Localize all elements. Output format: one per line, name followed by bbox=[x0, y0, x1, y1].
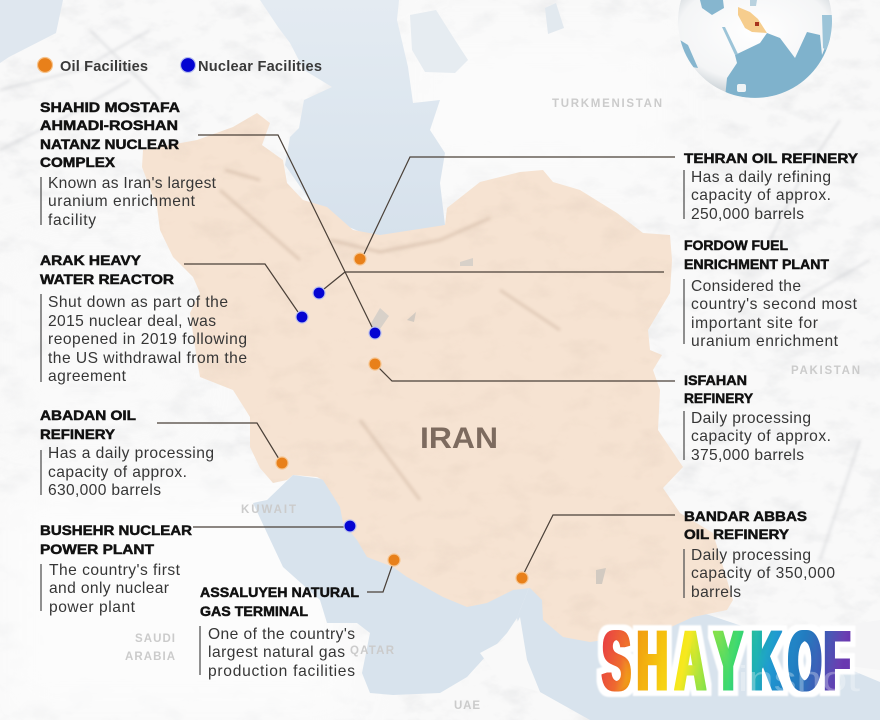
heading: Abadan: ABADAN OIL bbox=[40, 408, 136, 424]
heading: Isfahan bbox=[684, 373, 754, 407]
description: Tehran: Has a daily refining bbox=[691, 169, 831, 186]
description: Natanz: Known as Iran's largest bbox=[48, 175, 217, 192]
heading: Isfahan: REFINERY bbox=[684, 391, 754, 407]
marker: Bushehr bbox=[344, 520, 356, 532]
neighbouring country labels: QATAR bbox=[350, 645, 395, 657]
heading: Assaluyeh: ASSALUYEH NATURAL bbox=[200, 585, 359, 601]
description: Natanz: uranium enrichment bbox=[48, 193, 196, 210]
description: Fordow: country's second most bbox=[691, 296, 858, 313]
logo: SHAYKOF: SHAYKOF bbox=[602, 614, 850, 709]
neighbouring country labels: SAUDI bbox=[135, 633, 175, 645]
leader line: Natanz bbox=[198, 135, 373, 329]
leader line: Isfahan bbox=[379, 368, 675, 381]
leader line: Bushehr bbox=[193, 526, 346, 528]
description: Isfahan: capacity of approx. bbox=[691, 428, 831, 445]
heading: Natanz: NATANZ NUCLEAR bbox=[40, 137, 179, 153]
description: Bandar Abbas bbox=[684, 547, 835, 601]
marker: Tehran oil refinery bbox=[354, 253, 366, 265]
watermark: inshot bbox=[738, 658, 860, 699]
description: Bushehr: The country's first bbox=[49, 562, 181, 579]
heading: Abadan bbox=[40, 408, 136, 443]
heading: Bandar Abbas: OIL REFINERY bbox=[684, 527, 790, 543]
marker: Bandar Abbas bbox=[516, 572, 528, 584]
heading: Assaluyeh: GAS TERMINAL bbox=[200, 604, 308, 620]
marker: Isfahan refinery bbox=[369, 358, 381, 370]
description: Abadan: capacity of approx. bbox=[48, 464, 187, 481]
description: Tehran bbox=[684, 169, 831, 223]
description: Fordow: uranium enrichment bbox=[691, 333, 839, 350]
description: Arak bbox=[41, 294, 247, 385]
description: Bushehr bbox=[41, 562, 181, 616]
heading: Arak: ARAK HEAVY bbox=[40, 253, 142, 269]
map: Iran territory bbox=[140, 110, 740, 650]
description: Arak: reopened in 2019 following bbox=[48, 331, 247, 348]
description: Arak: 2015 nuclear deal, was bbox=[48, 313, 216, 330]
description: Isfahan: 375,000 barrels bbox=[691, 447, 804, 464]
heading: Natanz bbox=[40, 100, 180, 171]
description: Assaluyeh: One of the country's bbox=[208, 626, 355, 643]
description: Abadan: Has a daily processing bbox=[48, 445, 214, 462]
leader line: Bandar Abbas bbox=[524, 515, 675, 573]
heading: Natanz: SHAHID MOSTAFA bbox=[40, 100, 180, 116]
inset globe bbox=[678, 0, 832, 98]
leader line: Tehran bbox=[364, 157, 675, 254]
heading: Abadan: REFINERY bbox=[40, 427, 116, 443]
heading: Arak: WATER REACTOR bbox=[40, 272, 174, 288]
description: Assaluyeh bbox=[200, 626, 355, 680]
description: Isfahan: Daily processing bbox=[691, 410, 811, 427]
callout: Arak bbox=[40, 253, 247, 385]
heading: Assaluyeh bbox=[200, 585, 359, 620]
description: Bushehr: power plant bbox=[49, 599, 136, 616]
legend: oil label: Oil Facilities bbox=[60, 59, 148, 75]
callout: Abadan bbox=[40, 408, 214, 499]
description: Bandar Abbas: barrels bbox=[691, 584, 741, 601]
legend bbox=[38, 58, 322, 75]
description: Isfahan bbox=[684, 410, 831, 464]
heading: Bushehr: BUSHEHR NUCLEAR bbox=[40, 523, 192, 539]
heading: Natanz: COMPLEX bbox=[40, 155, 116, 171]
heading: Fordow: FORDOW FUEL bbox=[684, 238, 788, 254]
callout: Bushehr bbox=[40, 523, 192, 616]
legend: nuclear label: Nuclear Facilities bbox=[198, 59, 322, 75]
heading: Isfahan: ISFAHAN bbox=[684, 373, 747, 389]
description: Tehran: 250,000 barrels bbox=[691, 206, 804, 223]
description: Arak: Shut down as part of the bbox=[48, 294, 228, 311]
callout: Natanz bbox=[40, 100, 217, 229]
neighbouring country labels: PAKISTAN bbox=[791, 365, 860, 377]
heading: Fordow bbox=[684, 238, 829, 273]
leader line: Abadan bbox=[157, 423, 279, 459]
callout: Bandar Abbas bbox=[684, 509, 835, 601]
callout: Assaluyeh bbox=[200, 585, 359, 680]
leader line: Arak bbox=[184, 264, 298, 312]
country label: Iran: IRAN bbox=[420, 422, 498, 455]
description: Bandar Abbas: Daily processing bbox=[691, 547, 811, 564]
description: Arak: agreement bbox=[48, 368, 127, 385]
description: Fordow: Considered the bbox=[691, 278, 801, 295]
heading: Arak bbox=[40, 253, 174, 288]
heading: Bushehr bbox=[40, 523, 192, 558]
marker: Arak bbox=[296, 311, 308, 323]
callout: Tehran bbox=[684, 151, 859, 223]
callout: Fordow bbox=[684, 238, 858, 350]
heading: Natanz: AHMADI-ROSHAN bbox=[40, 118, 178, 134]
legend: oil marker bbox=[38, 58, 52, 72]
neighbouring country labels: TURKMENISTAN bbox=[552, 98, 662, 110]
neighbouring country labels: KUWAIT bbox=[241, 504, 296, 516]
description: Natanz: facility bbox=[48, 212, 96, 229]
heading: Bandar Abbas: BANDAR ABBAS bbox=[684, 509, 807, 525]
description: Assaluyeh: production facilities bbox=[208, 663, 355, 680]
neighbouring country labels: UAE bbox=[454, 700, 480, 712]
neighbouring country labels: ARABIA bbox=[125, 651, 175, 663]
marker: Fordow bbox=[313, 287, 325, 299]
description: Bushehr: and only nuclear bbox=[49, 580, 169, 597]
description: Abadan bbox=[41, 445, 214, 499]
heading: Bushehr: POWER PLANT bbox=[40, 542, 154, 558]
description: Tehran: capacity of approx. bbox=[691, 187, 831, 204]
leader line: Assaluyeh bbox=[367, 566, 392, 592]
callout: Isfahan bbox=[684, 373, 831, 464]
legend: nuclear marker bbox=[180, 58, 196, 72]
description: Fordow bbox=[684, 278, 858, 350]
marker: Abadan refinery bbox=[276, 457, 288, 469]
leader line: Fordow bbox=[324, 272, 664, 289]
description: Arak: the US withdrawal from the bbox=[48, 350, 247, 367]
neighbouring country labels bbox=[125, 98, 860, 712]
description: Bandar Abbas: capacity of 350,000 bbox=[691, 565, 835, 582]
marker: Assaluyeh bbox=[388, 554, 400, 566]
description: Abadan: 630,000 barrels bbox=[48, 482, 161, 499]
heading: Tehran: TEHRAN OIL REFINERY bbox=[684, 151, 859, 167]
description: Assaluyeh: largest natural gas bbox=[208, 644, 345, 661]
heading: Bandar Abbas bbox=[684, 509, 807, 543]
description: Natanz bbox=[41, 175, 217, 229]
description: Fordow: important site for bbox=[691, 315, 818, 332]
heading: Fordow: ENRICHMENT PLANT bbox=[684, 257, 829, 273]
marker: Natanz bbox=[369, 327, 381, 339]
